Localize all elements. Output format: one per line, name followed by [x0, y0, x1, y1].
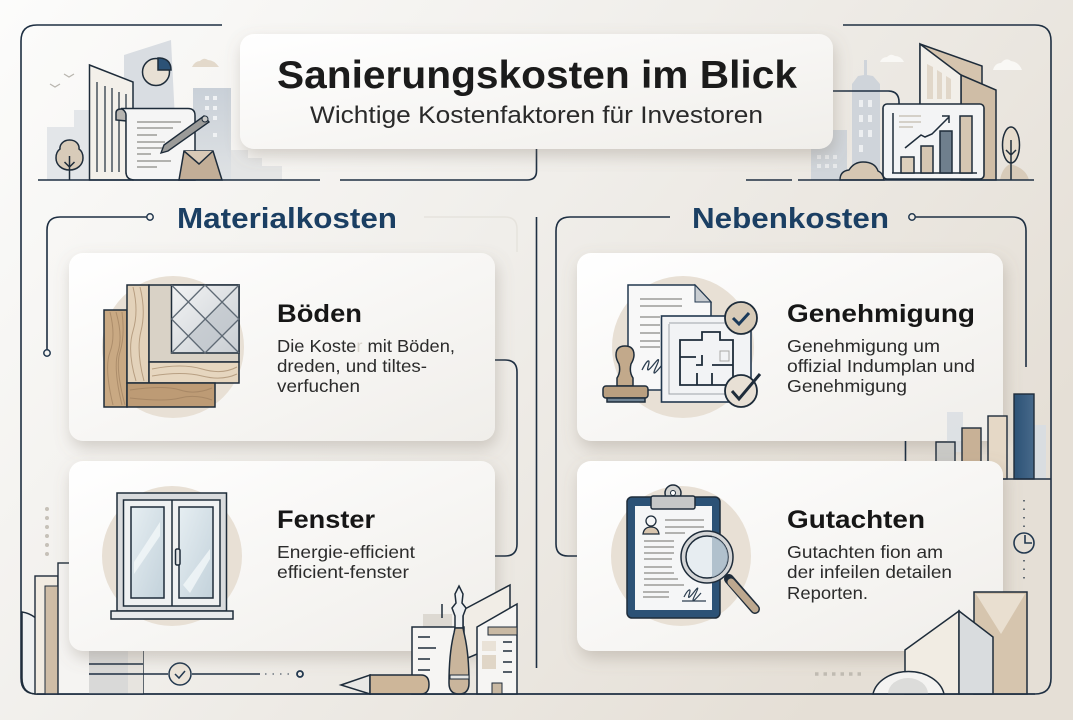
icon: clipboard with magnifier: [611, 485, 755, 626]
icon: bag: [179, 151, 222, 180]
bottom frame line: [37, 693, 1035, 695]
description: Böden: dreden, und tiltes-: [277, 356, 427, 376]
connector lines: [44, 214, 1026, 668]
text: Genehmigung: Genehmigung: [787, 300, 975, 328]
panel: Böden: [69, 253, 495, 441]
title: Sanierungskosten im Blick: [277, 54, 797, 97]
bottom-left illustration behind cards: [22, 563, 303, 694]
description: Genehmigung: [787, 336, 975, 396]
panel: Gutachten: [577, 461, 1003, 651]
icon: stamp: [603, 346, 648, 402]
description: Genehmigung: Genehmigung um: [787, 336, 940, 356]
bottom tools illustration: [341, 585, 517, 694]
heading: Materialkosten: Materialkosten: [177, 203, 397, 235]
top-left city illustration: [47, 40, 282, 180]
icon: pen: [161, 116, 209, 153]
icon: chart board: [883, 104, 984, 179]
decorative dots row: [815, 672, 866, 676]
description: Fenster: efficient-fenster: [277, 562, 409, 582]
timeline with clock: [1014, 500, 1034, 582]
description: Fenster: [277, 542, 415, 582]
icon: window: [102, 486, 242, 626]
icon: cloud: [192, 59, 219, 67]
subtitle: Wichtige Kostenfaktoren für Investoren: [310, 102, 763, 129]
title card: [240, 34, 833, 149]
icon: check badge top: [725, 302, 757, 334]
connector line: [833, 91, 899, 108]
icon: document: [116, 108, 195, 180]
icon: folded building: [920, 44, 996, 180]
icon: birds: [50, 74, 74, 87]
text: Gutachten: Gutachten: [787, 506, 925, 534]
background skyline left: [47, 40, 282, 180]
icon: pie chart: [142, 58, 171, 86]
panel: Genehmigung: [577, 253, 1003, 441]
decorative dots: [45, 507, 49, 556]
heading: Nebenkosten: Nebenkosten: [692, 203, 889, 235]
icon: flooring samples: [102, 276, 244, 418]
top-right city illustration: [811, 44, 1029, 180]
description: Böden: verfuchen: [277, 376, 360, 396]
right ground line: [746, 179, 1034, 181]
description: Fenster: Energie-efficient: [277, 542, 415, 562]
icon: bush: [840, 162, 884, 180]
description: Gutachten: Reporten.: [787, 583, 868, 603]
description: Genehmigung: offizial Indumplan und: [787, 356, 975, 376]
description: Gutachten: Gutachten fion am: [787, 542, 943, 562]
header ground line: [38, 148, 536, 180]
icon: clouds: [880, 55, 1022, 70]
icon: folded papers: [412, 585, 517, 694]
text: Böden: Böden: [277, 300, 362, 328]
description: Böden: Die Koster mit Böden,: [277, 336, 455, 356]
bottom-right buildings illustration: [873, 592, 1027, 694]
icon: permit documents: [603, 276, 760, 418]
description: Genehmigung: Genehmigung: [787, 376, 907, 396]
bar chart decoration: [906, 394, 1051, 479]
description: Böden: [277, 336, 455, 396]
description: Gutachten: [787, 542, 952, 603]
icon: tree: [56, 140, 83, 180]
icon: magnifier: [681, 531, 755, 609]
panel: Fenster: [69, 461, 495, 651]
background skyline right: [811, 60, 880, 180]
icon: check badge bottom: [725, 374, 760, 407]
icon: tree: [1000, 127, 1029, 180]
text: Fenster: Fenster: [277, 506, 375, 534]
description: Gutachten: der infeilen detailen: [787, 562, 952, 582]
icon: main building: [90, 65, 133, 180]
icon: screwdriver: [449, 586, 469, 694]
icon: pencil: [341, 675, 429, 694]
